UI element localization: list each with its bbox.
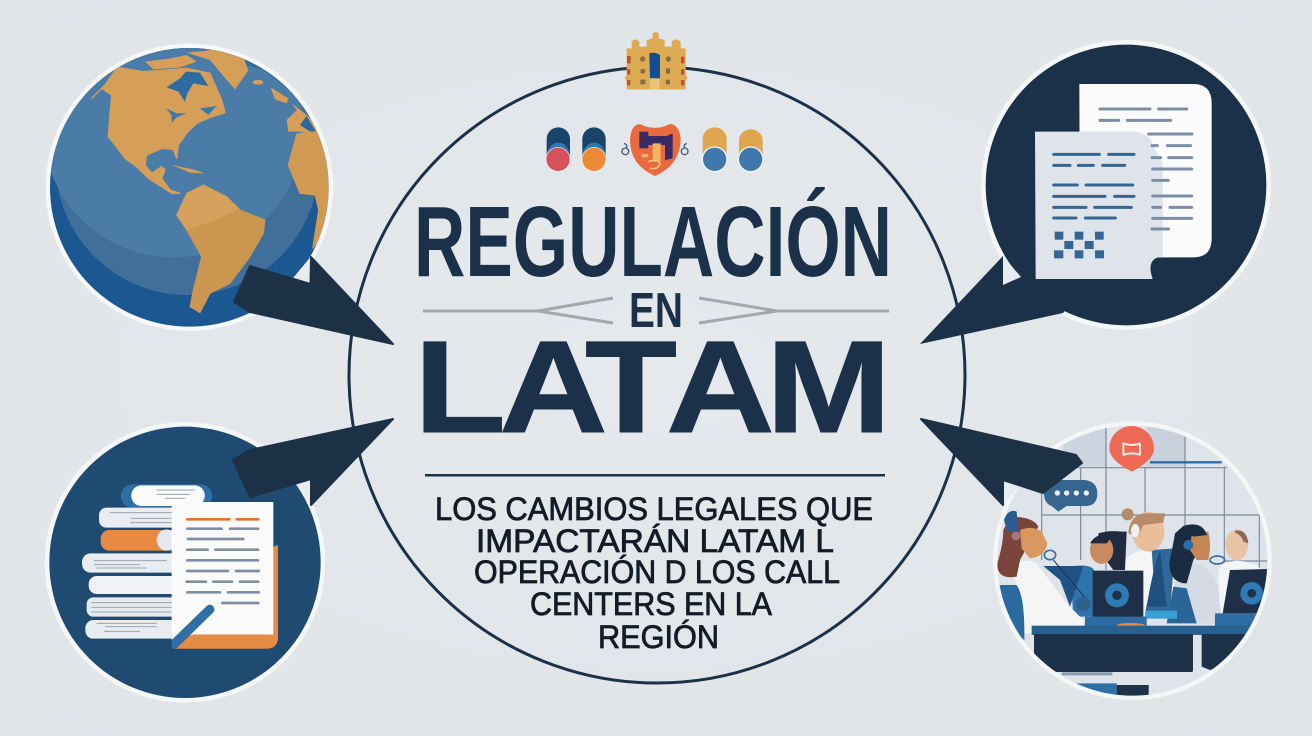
person right far	[1218, 530, 1260, 614]
red speech badge	[1109, 426, 1154, 472]
icon: books and document circle	[45, 422, 325, 703]
front page text lines	[1054, 154, 1134, 218]
book stack	[82, 484, 212, 639]
back page	[1079, 84, 1212, 270]
divider line	[425, 474, 885, 476]
pill: gold one	[702, 127, 728, 172]
icon: golden castle	[625, 32, 688, 90]
arrow: globe to center	[234, 257, 393, 344]
woman left	[997, 511, 1091, 640]
checker pattern	[1054, 232, 1104, 258]
subtitle	[435, 491, 873, 655]
subtitle: OPERACIÓN D LOS CALL	[474, 554, 840, 590]
blue chat bubble	[1044, 480, 1097, 512]
woman right	[1167, 524, 1225, 623]
title: EN: EN	[629, 284, 683, 338]
ornament: left chevron line	[423, 298, 613, 323]
icon: call center team circle	[990, 420, 1277, 707]
subtitle: REGIÓN	[598, 619, 719, 655]
arrow: books to center	[233, 419, 393, 505]
front page	[1035, 132, 1163, 279]
subtitle: IMPACTARÁN LATAM L	[476, 523, 834, 559]
subtitle: LOS CAMBIOS LEGALES QUE	[435, 491, 873, 527]
document page	[172, 502, 273, 640]
monitors	[1085, 569, 1268, 628]
pill: orange	[582, 127, 606, 172]
back page text lines	[1100, 109, 1192, 229]
icon: globe	[46, 44, 333, 331]
person man center	[1122, 508, 1175, 613]
desks	[1032, 626, 1251, 696]
crest	[622, 124, 688, 176]
subtitle: CENTERS EN LA	[530, 586, 773, 622]
central circle	[349, 67, 965, 683]
icon row: pills and crest	[546, 124, 764, 176]
title: LATAM: LATAM	[414, 313, 891, 460]
person second left	[1043, 531, 1127, 617]
document text lines	[187, 519, 259, 603]
arrow: documents to center	[920, 256, 1075, 344]
pill: gold two	[738, 129, 764, 172]
pen	[172, 605, 214, 648]
arrow: team to center	[921, 419, 1082, 505]
pill: red	[546, 127, 570, 172]
ornament: right chevron line	[699, 298, 889, 323]
wall grid	[1033, 427, 1270, 573]
orange cover	[173, 545, 278, 649]
icon: documents circle	[981, 40, 1271, 330]
title: REGULACIÓN: REGULACIÓN	[414, 186, 892, 298]
